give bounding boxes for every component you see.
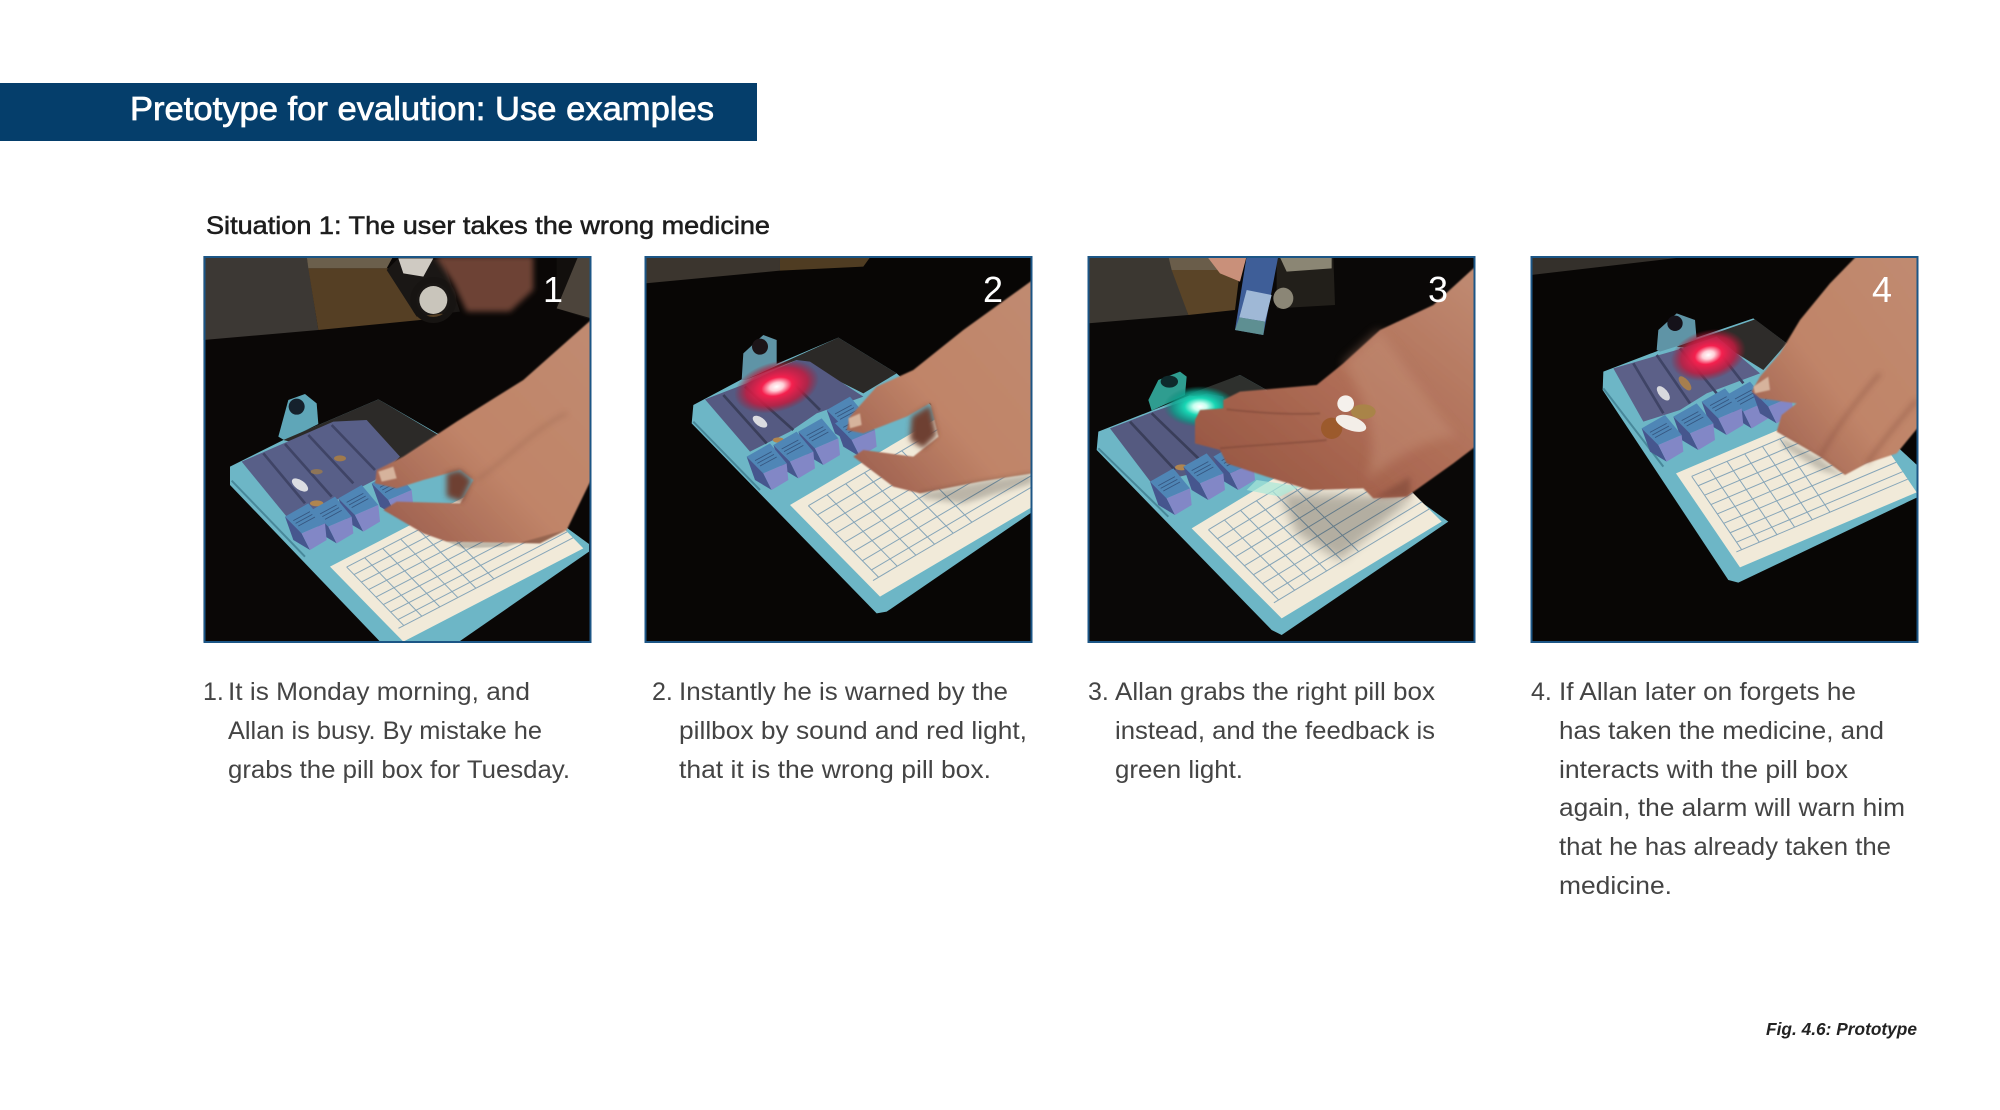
step 1 description: 1. xyxy=(203,678,224,706)
photo frame 1 xyxy=(204,257,590,642)
step 2 description: that it is the wrong pill box. xyxy=(679,756,991,784)
step number 2: 2 xyxy=(983,269,1003,310)
step number 3: 3 xyxy=(1428,269,1448,310)
title text: Pretotype for evalution: Use examples xyxy=(130,90,714,127)
step 2 description: Instantly he is warned by the xyxy=(679,678,1008,706)
step 1 description: grabs the pill box for Tuesday. xyxy=(228,756,570,784)
step 2 description: 2. xyxy=(652,678,673,706)
step 4 description: has taken the medicine, and xyxy=(1559,717,1884,745)
step 1 description: It is Monday morning, and xyxy=(228,678,530,706)
step 3 description: green light. xyxy=(1115,756,1243,784)
step number 1: 1 xyxy=(543,269,563,310)
figure caption: Fig. 4.6: Prototype xyxy=(1766,1019,1917,1039)
title banner xyxy=(0,83,757,141)
photo 3: green confirmation light and pills in hand xyxy=(1088,256,1475,643)
step 1 description xyxy=(203,678,570,784)
photo 4: red alarm on repeated use xyxy=(1531,256,1919,643)
step 2 description: pillbox by sound and red light, xyxy=(679,717,1027,745)
section heading: Situation 1: The user takes the wrong medicine xyxy=(206,212,770,240)
photo frame 2 xyxy=(646,257,1032,642)
step 4 description: that he has already taken the xyxy=(1559,833,1891,861)
step 2 description xyxy=(652,678,1027,784)
photo frame 4 xyxy=(1532,257,1918,642)
step 4 description xyxy=(1531,678,1905,900)
step 3 description: Allan grabs the right pill box xyxy=(1115,678,1436,706)
step 4 description: If Allan later on forgets he xyxy=(1559,678,1856,706)
photo 2: red warning light xyxy=(645,256,1067,643)
step 4 description: 4. xyxy=(1531,678,1552,706)
step number 4: 4 xyxy=(1872,269,1892,310)
photo 1: wrong pill box grabbed xyxy=(203,256,591,643)
photo frame 3 xyxy=(1088,257,1474,642)
step 1 description: Allan is busy. By mistake he xyxy=(228,717,542,745)
step 3 description xyxy=(1088,678,1436,784)
step 3 description: instead, and the feedback is xyxy=(1115,717,1435,745)
step 4 description: again, the alarm will warn him xyxy=(1559,794,1905,822)
step 3 description: 3. xyxy=(1088,678,1109,706)
step 4 description: interacts with the pill box xyxy=(1559,756,1849,784)
step 4 description: medicine. xyxy=(1559,872,1672,900)
